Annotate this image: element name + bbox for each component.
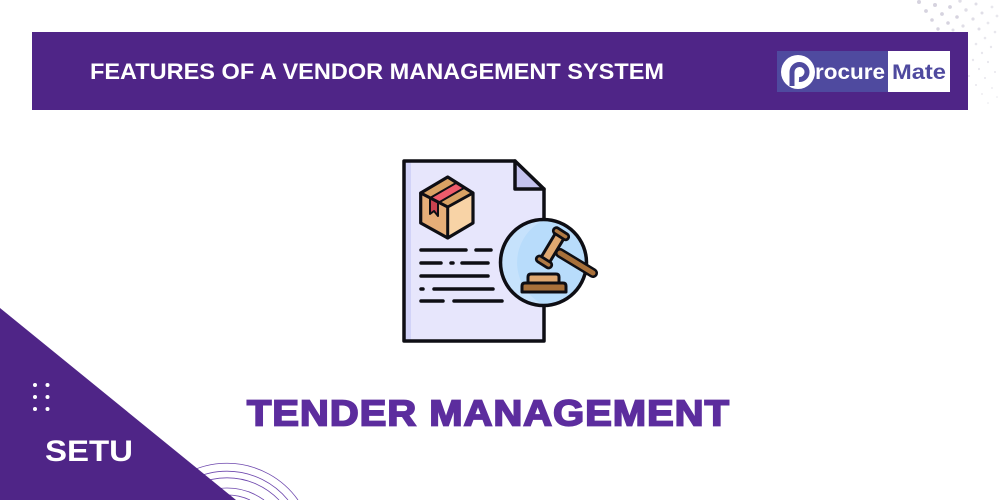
- logo: ProcureMate: rocure: [815, 61, 885, 84]
- dot grid: [33, 383, 50, 411]
- logo mark: P roundel: [781, 55, 815, 89]
- header title: FEATURES OF A VENDOR MANAGEMENT SYSTEM: [90, 59, 664, 84]
- heading: tender management: TENDER MANAGEMENT: [247, 392, 730, 434]
- gavel sound block: [522, 274, 566, 292]
- label: SETU: SETU: [45, 435, 133, 468]
- icon: tender document with gavel: [404, 161, 593, 341]
- document text lines: [421, 250, 502, 301]
- icon: cardboard box: [421, 177, 473, 238]
- logo: ProcureMate: Mate: [892, 61, 946, 84]
- gavel head and handle: [539, 231, 593, 273]
- logo: ProcureMate: [777, 51, 950, 92]
- gavel circle: [500, 220, 593, 306]
- dotted pattern: top right: [917, 0, 998, 104]
- corner triangle with SETU: [0, 308, 236, 500]
- header banner: [32, 32, 968, 110]
- decorative concentric arcs: [156, 463, 298, 500]
- document sheet: [404, 161, 544, 341]
